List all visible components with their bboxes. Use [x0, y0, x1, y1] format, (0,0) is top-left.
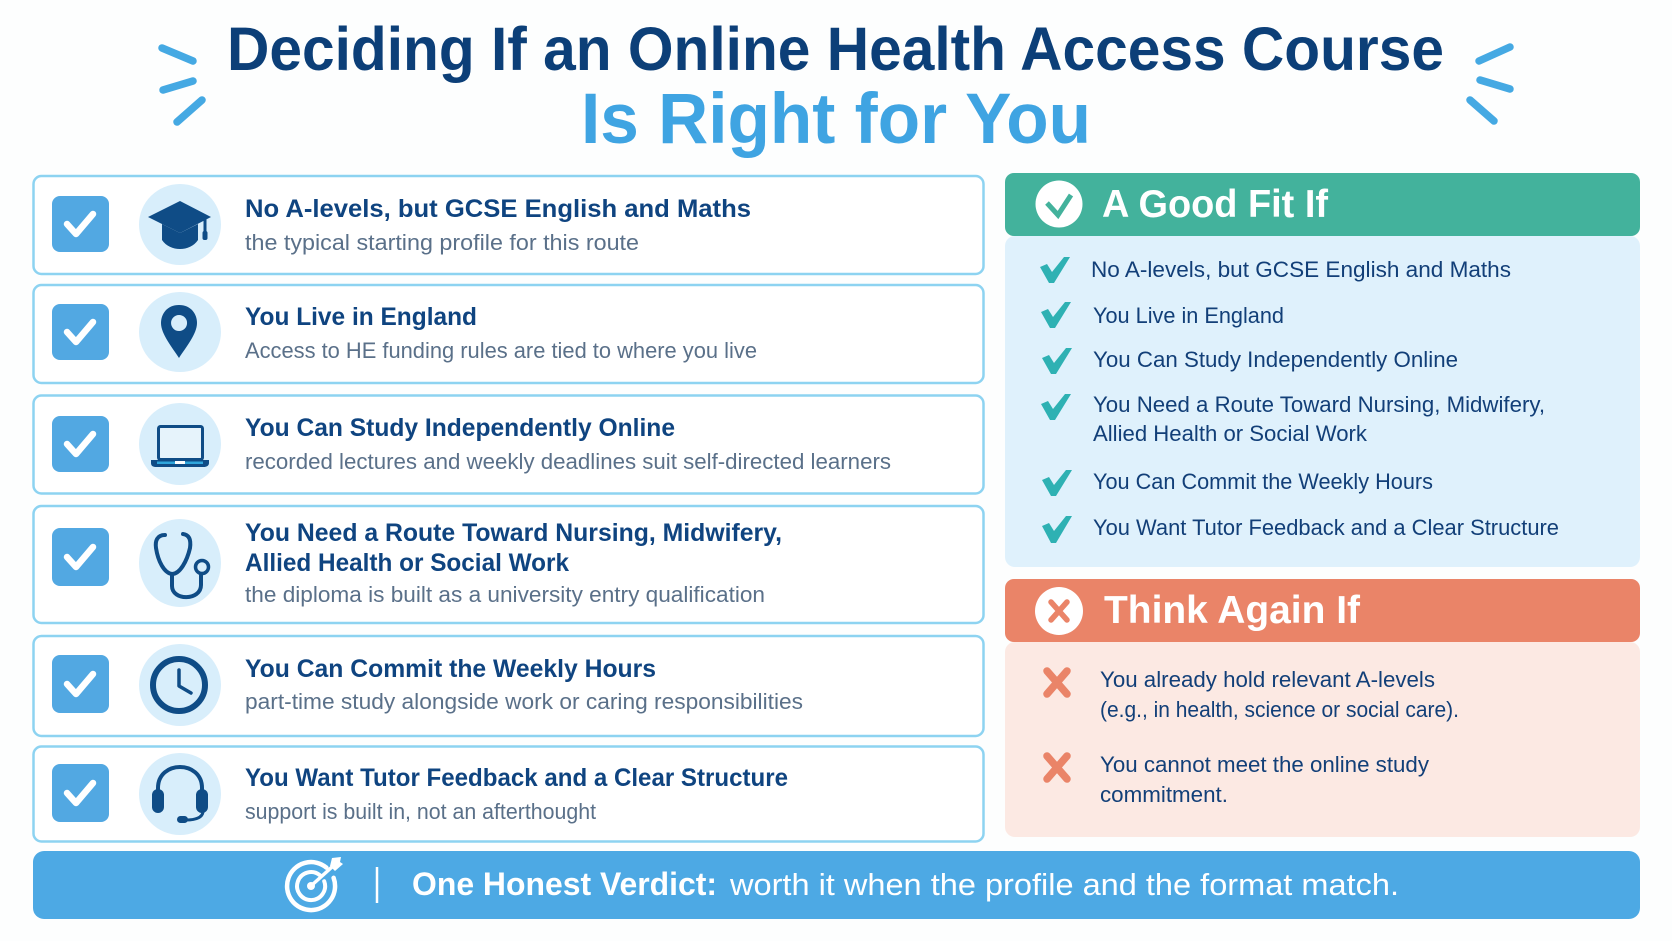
- cautions list: commitment.: [1100, 782, 1228, 807]
- icon: checkbox: [52, 764, 109, 822]
- icon: stethoscope: [139, 519, 221, 607]
- cautions list: (e.g., in health, science or social care).: [1100, 697, 1459, 722]
- cautions list: [1047, 667, 1459, 807]
- heading: You Want Tutor Feedback and a Clear Structure: [245, 764, 788, 792]
- panel: criterion 5: [34, 636, 984, 736]
- panel: a good fit if: [1005, 173, 1640, 567]
- description: part-time study alongside work or caring responsibilities: [245, 689, 803, 714]
- icon: left sparkle lines: [162, 48, 202, 122]
- description: Access to HE funding rules are tied to where you live: [245, 338, 757, 363]
- checklist: You Can Study Independently Online: [1093, 347, 1458, 372]
- header bar: [1005, 173, 1640, 236]
- description: support is built in, not an afterthought: [245, 799, 597, 824]
- verdict text: One Honest Verdict:: [412, 866, 717, 902]
- heading: No A-levels, but GCSE English and Maths: [245, 195, 751, 223]
- panel: criterion 1: [34, 176, 984, 274]
- icon: checkbox: [52, 528, 109, 586]
- cautions list: You cannot meet the online study: [1100, 752, 1429, 777]
- panel: criterion 4: Allied Health or Social Work: [245, 549, 569, 577]
- checklist: Allied Health or Social Work: [1093, 421, 1368, 446]
- icon: checkbox: [52, 416, 109, 472]
- divider: [376, 867, 378, 903]
- header bar: [1005, 579, 1640, 642]
- checklist: You Live in England: [1093, 303, 1284, 328]
- verdict text: [412, 866, 1399, 902]
- heading: You Live in England: [245, 303, 477, 331]
- checklist: You Can Commit the Weekly Hours: [1093, 469, 1433, 494]
- icon: laptop: [139, 403, 221, 485]
- title: Is Right for You: [581, 80, 1091, 159]
- checklist: [1040, 257, 1559, 543]
- panel: criterion 4: [34, 506, 984, 623]
- icon: checkbox: [52, 304, 109, 360]
- icon: graduation cap: [139, 184, 221, 265]
- panel: criterion 3: [34, 396, 984, 494]
- header bar: A Good Fit If: [1102, 183, 1329, 226]
- checklist: No A-levels, but GCSE English and Maths: [1091, 257, 1511, 282]
- description: recorded lectures and weekly deadlines suit self-directed learners: [245, 449, 891, 474]
- checklist: You Need a Route Toward Nursing, Midwifery,: [1093, 392, 1545, 417]
- icon: checkbox: [52, 196, 109, 252]
- header bar: Think Again If: [1104, 589, 1361, 632]
- panel: criterion 2: [34, 285, 984, 383]
- heading: You Can Study Independently Online: [245, 414, 675, 442]
- description: the diploma is built as a university entry qualification: [245, 582, 765, 607]
- icon: headset: [139, 753, 221, 835]
- icon: target with arrow: [287, 857, 343, 910]
- icon: checkbox: [52, 655, 109, 713]
- icon: location pin: [139, 292, 221, 372]
- verdict text: worth it when the profile and the format match.: [729, 867, 1399, 902]
- panel: criterion 6: [34, 746, 984, 842]
- checklist: You Want Tutor Feedback and a Clear Structure: [1093, 515, 1559, 540]
- icon: right sparkle lines: [1470, 47, 1510, 121]
- heading: You Can Commit the Weekly Hours: [245, 655, 656, 683]
- icon: clock: [139, 644, 221, 726]
- title: Deciding If an Online Health Access Course: [227, 15, 1444, 83]
- description: the typical starting profile for this route: [245, 230, 639, 255]
- panel: think again if: [1005, 579, 1640, 837]
- heading: You Need a Route Toward Nursing, Midwifery,: [245, 519, 782, 547]
- cautions list: You already hold relevant A-levels: [1100, 667, 1435, 692]
- title: [227, 15, 1444, 159]
- verdict banner: [33, 851, 1640, 919]
